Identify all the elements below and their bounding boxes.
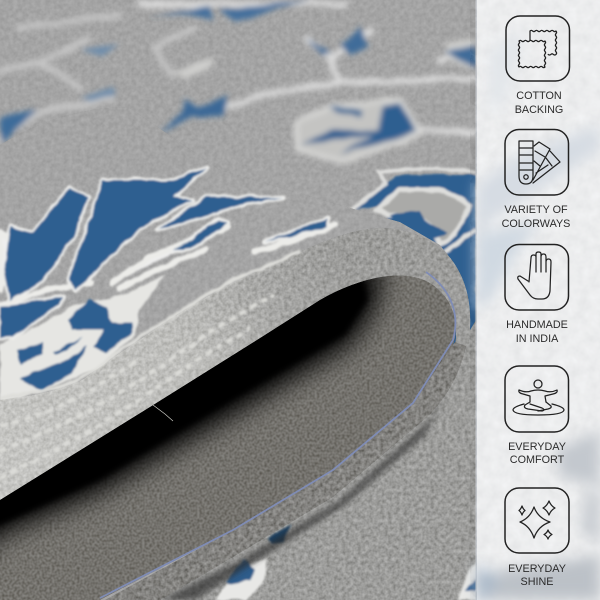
curled rug edge band: [0, 228, 470, 500]
icon: meditating figure: [505, 366, 568, 432]
label: BACKING: [515, 104, 563, 116]
label: VARIETY OF: [504, 204, 568, 216]
blue and white motif on lower carpet: [215, 525, 480, 600]
label: HANDMADE: [506, 319, 568, 331]
icon: cotton swatches: [506, 16, 570, 81]
white stripe along band top: [0, 252, 300, 398]
blurred rug motifs in the background: [0, 0, 476, 162]
label: COLORWAYS: [502, 218, 570, 230]
label: [508, 563, 566, 588]
feature: everyday shine: [505, 488, 569, 588]
label: [502, 204, 570, 230]
feature: everyday comfort: [505, 366, 568, 466]
large blue motif at right edge: [352, 168, 476, 345]
features side panel: [477, 0, 600, 600]
label: EVERYDAY: [508, 441, 566, 453]
feature: cotton backing: [506, 16, 570, 116]
dark hollow of the roll: [0, 276, 400, 558]
label: SHINE: [520, 576, 554, 588]
label: COMFORT: [510, 454, 565, 466]
icon: sparkles: [505, 488, 569, 553]
rug photo: [0, 0, 480, 600]
blue stitching along the edge: [100, 272, 455, 598]
blue floral motif with white outlines: [0, 168, 335, 402]
darker pile on rim of lower edge: [105, 342, 466, 600]
lower carpet under the roll: [160, 321, 476, 600]
ribbed pile stripes on the band: [0, 295, 275, 478]
panel background: faint rug motifs: [477, 30, 600, 600]
dark shadow beneath carpet edge: [160, 390, 448, 600]
label: [515, 90, 563, 116]
rolled rug top face: [0, 108, 448, 500]
label: [508, 441, 566, 466]
label: COTTON: [516, 90, 562, 102]
label: IN INDIA: [516, 333, 559, 345]
label: EVERYDAY: [508, 563, 566, 575]
feature: handmade in india: [505, 244, 568, 345]
icon: open hand: [505, 244, 568, 310]
icon: colour fan deck: [505, 130, 568, 195]
rug underside (cotton backing): [0, 271, 456, 600]
photo edge line: [476, 0, 477, 600]
label: [506, 319, 568, 345]
feature: variety of colorways: [502, 130, 570, 230]
stray thread: [153, 405, 173, 421]
